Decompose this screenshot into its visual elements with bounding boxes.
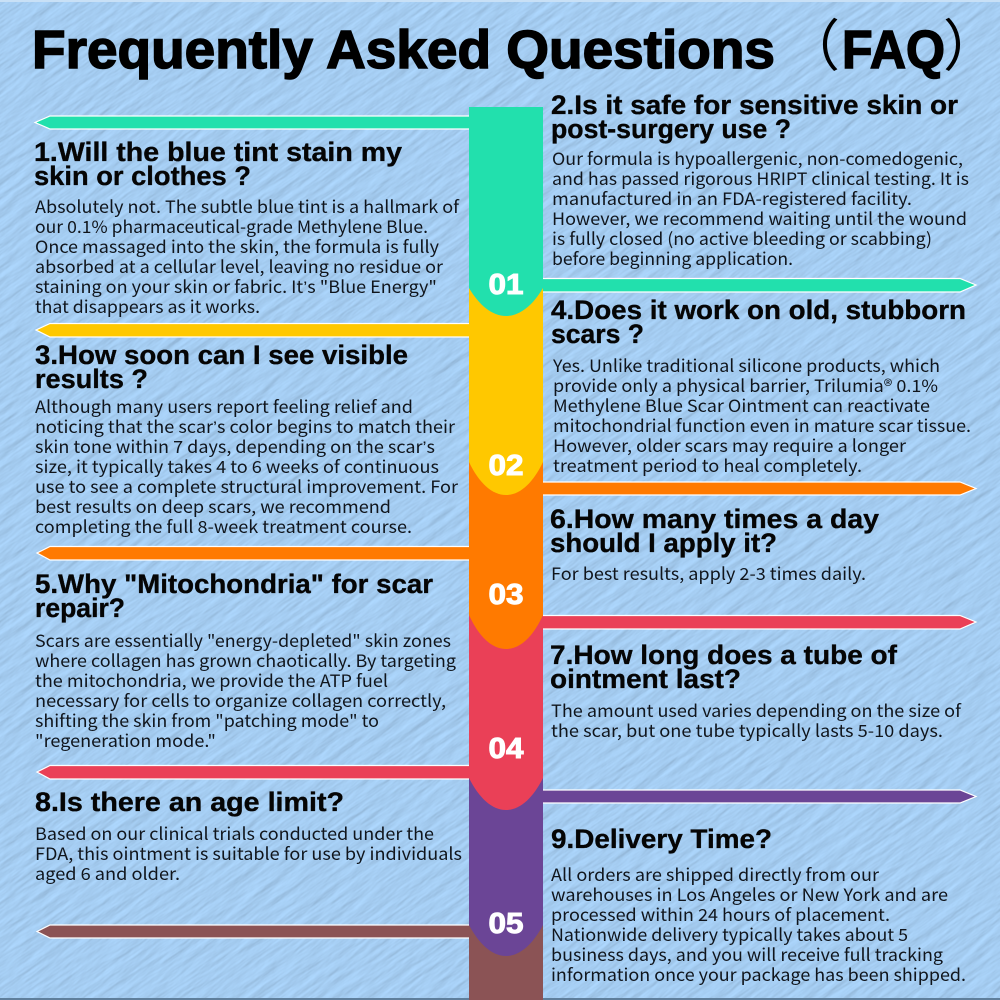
title <box>32 2 999 83</box>
answer 8: FDA, this ointment is suitable for use by individuals <box>35 840 462 865</box>
heading 3: results ? <box>35 364 148 394</box>
heading 2: 2.Is it safe for sensitive skin or <box>551 90 958 120</box>
segment 03: orange <box>469 440 543 649</box>
segment 05: purple <box>469 760 543 956</box>
answer 5 <box>35 627 456 752</box>
panel: question 8 <box>35 787 462 885</box>
answer 8 <box>35 820 462 885</box>
arrow: yellow left <box>36 324 469 337</box>
heading 9: 9.Delivery Time? <box>551 824 772 854</box>
answer 1: absorbed at a cellular level, leaving no residue or <box>35 253 443 278</box>
answer 2: is fully closed (no active bleeding or scabbing) <box>552 225 932 250</box>
answer 2: manufactured in an FDA-registered facility. <box>552 185 912 210</box>
heading 4 <box>551 295 966 349</box>
number 03: 03 <box>488 579 524 611</box>
number 04: 04 <box>488 733 524 765</box>
heading 6 <box>550 504 879 558</box>
heading 6: should I apply it? <box>550 528 777 558</box>
answer 4: However, older scars may require a longer <box>553 432 906 457</box>
answer 4: Methylene Blue Scar Ointment can reactivate <box>553 392 930 417</box>
answer 6: For best results, apply 2-3 times daily. <box>551 560 866 585</box>
arrow: orange left <box>37 546 469 560</box>
heading 5: repair? <box>35 593 125 623</box>
answer 2 <box>552 145 969 270</box>
heading 7 <box>550 640 898 694</box>
answer 5: shifting the skin from "patching mode" to <box>35 707 379 732</box>
answer 2: and has passed rigorous HRIPT clinical testing. It is <box>552 165 969 190</box>
arrow: brown left <box>37 925 469 938</box>
answer 1: staining on your skin or fabric. It ’s "Blue Energy" <box>35 273 437 298</box>
answer 3: size, it typically takes 4 to 6 weeks of continuous <box>35 453 439 478</box>
heading 8: 8.Is there an age limit? <box>35 787 344 817</box>
heading 5: 5.Why "Mitochondria" for scar <box>35 569 434 599</box>
panel: question 3 <box>35 340 458 538</box>
title: （ <box>784 2 840 83</box>
answer 1: Once massaged into the skin, the formula is fully <box>35 233 439 258</box>
answer 2: before beginning application. <box>552 245 793 270</box>
panel: question 7 <box>550 640 963 742</box>
title: FAQ <box>842 20 945 80</box>
answer 9: business days, and you will receive full tracking <box>551 941 943 966</box>
arrow: red right <box>543 616 976 629</box>
heading 1: 1.Will the blue tint stain my <box>34 137 402 167</box>
segment 04: red <box>469 600 543 810</box>
panel: question 6 <box>550 504 879 585</box>
title: ） <box>943 2 999 83</box>
answer 8: Based on our clinical trials conducted under the <box>35 820 434 845</box>
panel: question 4 <box>551 295 971 477</box>
answer 5: where collagen has grown chaotically. By targeting <box>35 647 456 672</box>
answer 4 <box>552 352 971 477</box>
answer 1: our 0.1% pharmaceutical-grade Methylene Blue. <box>35 213 428 238</box>
number 01: 01 <box>488 269 524 301</box>
segment 01: green <box>469 107 543 316</box>
answer 3: Although many users report feeling relief and <box>35 393 413 418</box>
central timeline column <box>469 107 543 1000</box>
answer 1: Absolutely not. The subtle blue tint is a hallmark of <box>35 193 461 218</box>
answer 4: Yes. Unlike traditional silicone products, which <box>552 352 940 377</box>
number 02: 02 <box>488 450 524 482</box>
answer 5: necessary for cells to organize collagen correctly, <box>35 687 446 712</box>
panel: question 1 <box>34 137 461 318</box>
answer 3: use to see a complete structural improvement. For <box>35 473 458 498</box>
heading 5 <box>35 569 434 623</box>
answer 4: treatment period to heal completely. <box>553 452 862 477</box>
answer 7: The amount used varies depending on the size of <box>551 697 963 722</box>
panel: question 2 <box>551 90 969 270</box>
answer 7: the scar, but one tube typically lasts 5-10 days. <box>551 717 943 742</box>
answer 9 <box>551 861 966 986</box>
heading 2 <box>551 90 958 144</box>
answer 7 <box>551 697 963 742</box>
heading 3 <box>35 340 408 394</box>
answer 3: noticing that the scar ’s color begins to match their <box>35 413 455 438</box>
answer 9: Nationwide delivery typically takes about 5 <box>551 921 908 946</box>
arrow: green left <box>35 116 469 129</box>
answer 5: "regeneration mode." <box>35 727 216 752</box>
answer 1: that disappears as it works. <box>35 293 260 318</box>
arrow: green right <box>543 278 976 292</box>
title: Frequently Asked Questions <box>32 20 775 80</box>
heading 1 <box>34 137 402 191</box>
segment 02: yellow <box>469 270 543 495</box>
answer 4: mitochondrial function even in mature scar tissue. <box>553 412 971 437</box>
answer 9: information once your package has been shipped. <box>551 961 966 986</box>
answer 9: All orders are shipped directly from our <box>551 861 879 886</box>
answer 5: the mitochondria, we provide the ATP fuel <box>35 667 388 692</box>
heading 4: scars ? <box>551 319 644 349</box>
segment 05 end: brown <box>469 900 543 1000</box>
heading 3: 3.How soon can I see visible <box>35 340 408 370</box>
heading 4: 4.Does it work on old, stubborn <box>551 295 966 325</box>
arrow: purple right <box>543 790 976 803</box>
answer 2: Our formula is hypoallergenic, non-comedogenic, <box>552 145 963 170</box>
answer 8: aged 6 and older. <box>35 860 180 885</box>
answer 9: warehouses in Los Angeles or New York and are <box>551 881 948 906</box>
arrow: red left <box>37 766 469 779</box>
answer 3: best results on deep scars, we recommend <box>35 493 391 518</box>
panel: question 5 <box>35 569 456 752</box>
arrow: orange right <box>543 482 976 495</box>
answer 9: processed within 24 hours of placement. <box>551 901 890 926</box>
number 05: 05 <box>488 908 524 940</box>
answer 3: completing the full 8-week treatment course. <box>35 513 412 538</box>
heading 1: skin or clothes ? <box>34 161 251 191</box>
heading 7: 7.How long does a tube of <box>550 640 898 670</box>
panel: question 9 <box>551 824 966 986</box>
answer 1 <box>35 193 461 318</box>
heading 2: post-surgery use ? <box>551 114 791 144</box>
heading 6: 6.How many times a day <box>550 504 879 534</box>
answer 4: provide only a physical barrier, Trilumia® 0.1% <box>553 372 938 397</box>
answer 3 <box>35 393 458 538</box>
answer 3: skin tone within 7 days, depending on the scar ’s <box>35 433 435 458</box>
heading 7: ointment last? <box>550 664 741 694</box>
answer 2: However, we recommend waiting until the wound <box>552 205 967 230</box>
answer 5: Scars are essentially "energy-depleted" skin zones <box>35 627 451 652</box>
